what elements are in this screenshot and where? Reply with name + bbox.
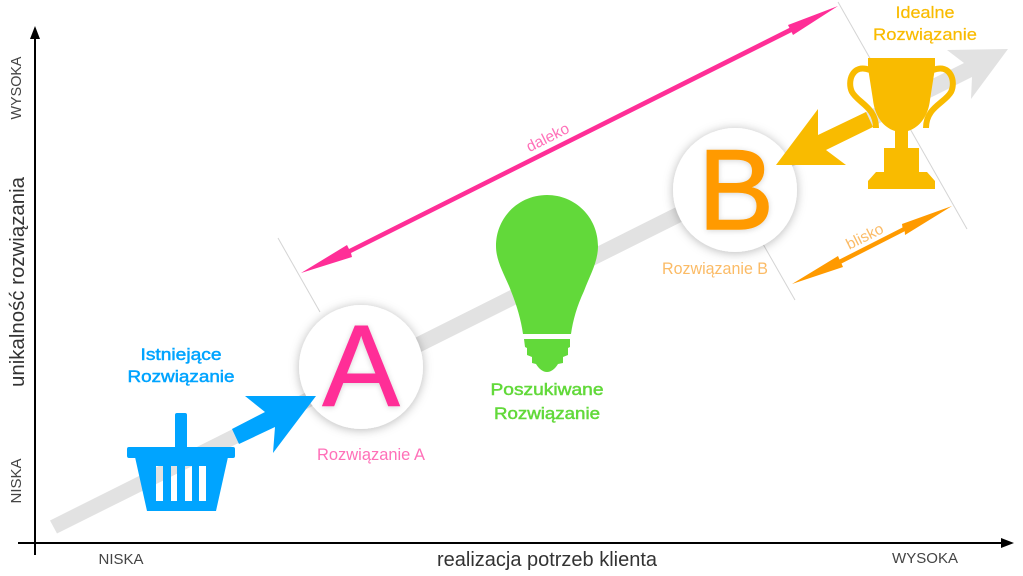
label: solution B: Rozwiązanie B <box>662 260 768 278</box>
label: existing solution: Istniejące <box>140 345 222 364</box>
label: solution A: Rozwiązanie A <box>317 446 425 464</box>
label: high horizontal: WYSOKA <box>892 551 958 567</box>
gray progress arrow <box>50 49 1008 534</box>
label: ideal solution <box>873 4 977 44</box>
label: sought solution: Poszukiwane <box>490 380 604 399</box>
gold arrow <box>776 109 873 165</box>
label: far: daleko <box>524 120 572 156</box>
circle B <box>673 127 797 254</box>
label: existing solution <box>128 345 234 386</box>
label: low horizontal: NISKA <box>98 552 144 568</box>
label: sought solution <box>490 380 604 423</box>
horizontal axis title: realizacja potrzeb klienta <box>437 549 658 571</box>
icon: light bulb <box>496 195 598 372</box>
vertical axis <box>30 26 40 555</box>
pink double arrow <box>301 6 838 273</box>
label: sought solution: Rozwiązanie <box>494 404 600 423</box>
circle B: B <box>698 127 774 254</box>
vertical axis title: unikalność rozwiązania <box>7 176 29 387</box>
horizontal axis <box>18 538 1014 548</box>
orange double arrow <box>792 206 952 284</box>
circle A: A <box>322 301 400 431</box>
thin boundary lines <box>278 2 967 312</box>
icon: trophy <box>850 58 953 189</box>
label: close: blisko <box>843 221 887 253</box>
icon: basket <box>127 413 235 511</box>
label: existing solution: Rozwiązanie <box>128 367 234 386</box>
label: ideal solution: Idealne <box>896 4 954 22</box>
label: ideal solution: Rozwiązanie <box>873 26 977 44</box>
circle A <box>299 301 423 431</box>
blue arrow <box>232 396 316 453</box>
label: low vertical: NISKA <box>9 458 25 503</box>
label: high vertical: WYSOKA <box>9 56 25 120</box>
